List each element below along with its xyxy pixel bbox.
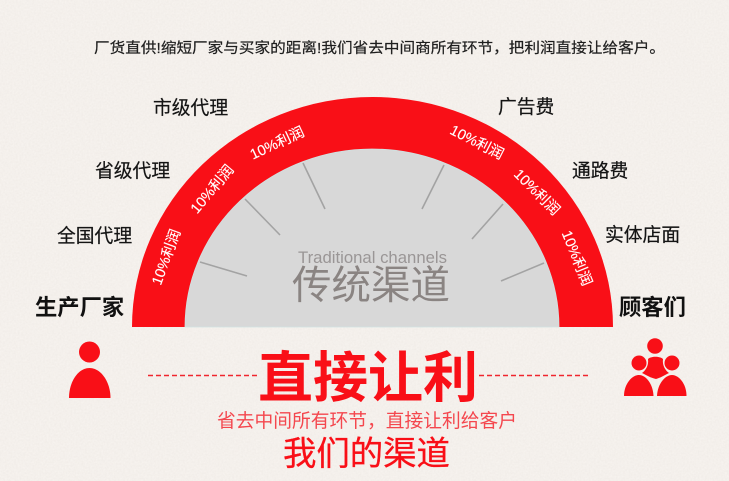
profit labels on arc: 10%利润 [247, 123, 307, 163]
profit labels on arc: 10%利润 [510, 166, 563, 219]
dashed connector right [479, 374, 591, 376]
red arc band [132, 97, 613, 327]
semicircle diagram: traditional channels [132, 97, 613, 327]
left channel labels: 省级代理 [95, 160, 170, 181]
right cost labels: 实体店面 [605, 224, 680, 245]
gray inner semicircle [185, 149, 559, 327]
profit labels on arc [149, 122, 595, 288]
tick lines [200, 163, 544, 281]
dashed connector left [148, 374, 259, 376]
main heading: 直接让利 [258, 347, 478, 409]
left channel labels: 市级代理 [153, 97, 228, 118]
subheading: 省去中间所有环节，直接让利给客户 [217, 410, 517, 431]
right cost labels [498, 96, 680, 245]
right cost labels: 广告费 [498, 96, 554, 117]
left channel labels: 全国代理 [57, 225, 132, 246]
english caption: Traditional channels [298, 248, 447, 267]
icon: single person [69, 342, 110, 398]
profit labels on arc: 10%利润 [187, 162, 238, 217]
profit labels on arc: 10%利润 [558, 228, 595, 288]
profit labels on arc: 10%利润 [149, 227, 184, 287]
chinese caption: 传统渠道 [292, 264, 450, 308]
left channel labels [57, 97, 228, 246]
customers label: 顾客们 [619, 294, 686, 320]
manufacturer label: 生产厂家 [35, 294, 124, 320]
our channels heading: 我们的渠道 [283, 436, 450, 473]
intro text: 厂货直供!缩短厂家与买家的距离!我们省去中间商所有环节，把利润直接让给客户。 [94, 40, 665, 57]
right cost labels: 通路费 [572, 160, 628, 181]
icon: group of people [624, 338, 686, 396]
profit labels on arc: 10%利润 [447, 122, 506, 163]
